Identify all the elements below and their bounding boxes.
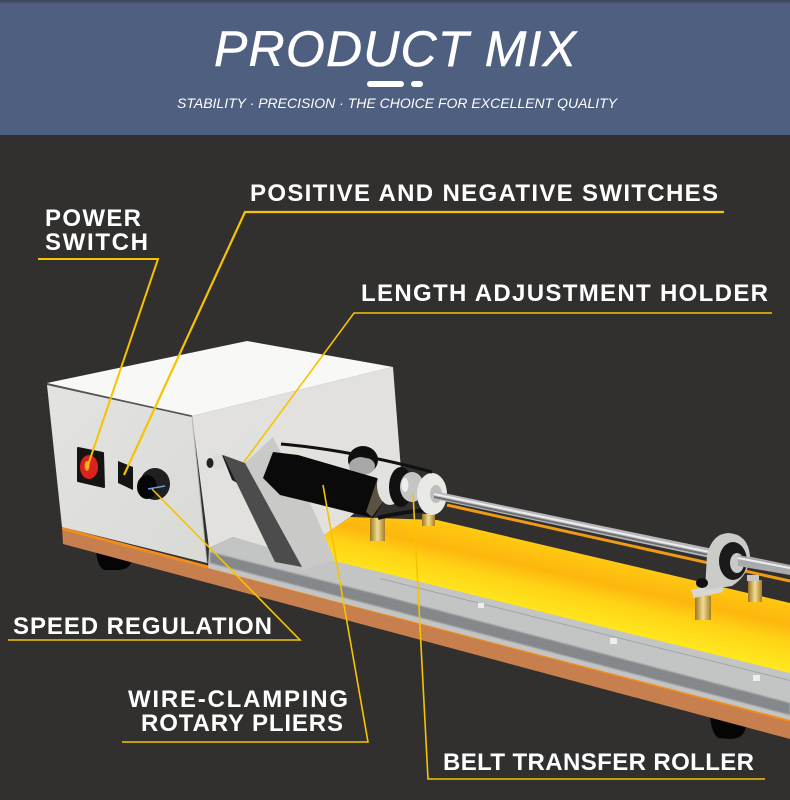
wooden base [62, 527, 790, 739]
header banner [0, 0, 790, 135]
support posts [370, 514, 762, 620]
bracket [206, 429, 335, 570]
yellow plate [300, 517, 790, 675]
callout: speed regulation: SPEED REGULATION [13, 613, 272, 640]
control box top [47, 341, 393, 416]
rear pulley [348, 446, 378, 474]
subtitle: STABILITY · PRECISION · THE CHOICE FOR EXCELLENT QUALITY [177, 95, 619, 111]
clamping pliers [263, 452, 388, 518]
rubber feet [96, 550, 746, 739]
callout: positive and negative switches: POSITIVE AND NEGATIVE SWITCHES [250, 180, 718, 207]
callout: positive and negative switches [124, 180, 724, 475]
callout: power switch: POWER [45, 205, 141, 232]
direction switch [118, 461, 133, 490]
callout: belt transfer roller: BELT TRANSFER ROLLER [443, 749, 754, 776]
power switch [78, 448, 104, 487]
callout: power switch [38, 205, 158, 468]
callout: wire-clamping rotary pliers: ROTARY PLIERS [141, 710, 343, 737]
aluminium rail [208, 537, 790, 720]
title dash ornament [367, 81, 423, 87]
pillow block bearing [691, 533, 790, 598]
machine illustration [47, 341, 790, 739]
callout: speed regulation [8, 489, 300, 640]
callout: power switch: SWITCH [45, 229, 148, 256]
callout: wire-clamping rotary pliers [122, 485, 368, 742]
belt pulley [377, 465, 447, 518]
speed knob [137, 468, 170, 500]
title: PRODUCT MIX [214, 21, 578, 77]
callout: belt transfer roller [413, 493, 765, 779]
control box front [47, 385, 207, 563]
steel shaft [434, 491, 790, 581]
callout: length adjustment holder: LENGTH ADJUSTMENT HOLDER [361, 280, 768, 307]
callout: length adjustment holder [244, 280, 772, 462]
control box side [192, 367, 401, 556]
drive belt [281, 444, 432, 472]
callout: wire-clamping rotary pliers: WIRE-CLAMPING [128, 686, 348, 713]
